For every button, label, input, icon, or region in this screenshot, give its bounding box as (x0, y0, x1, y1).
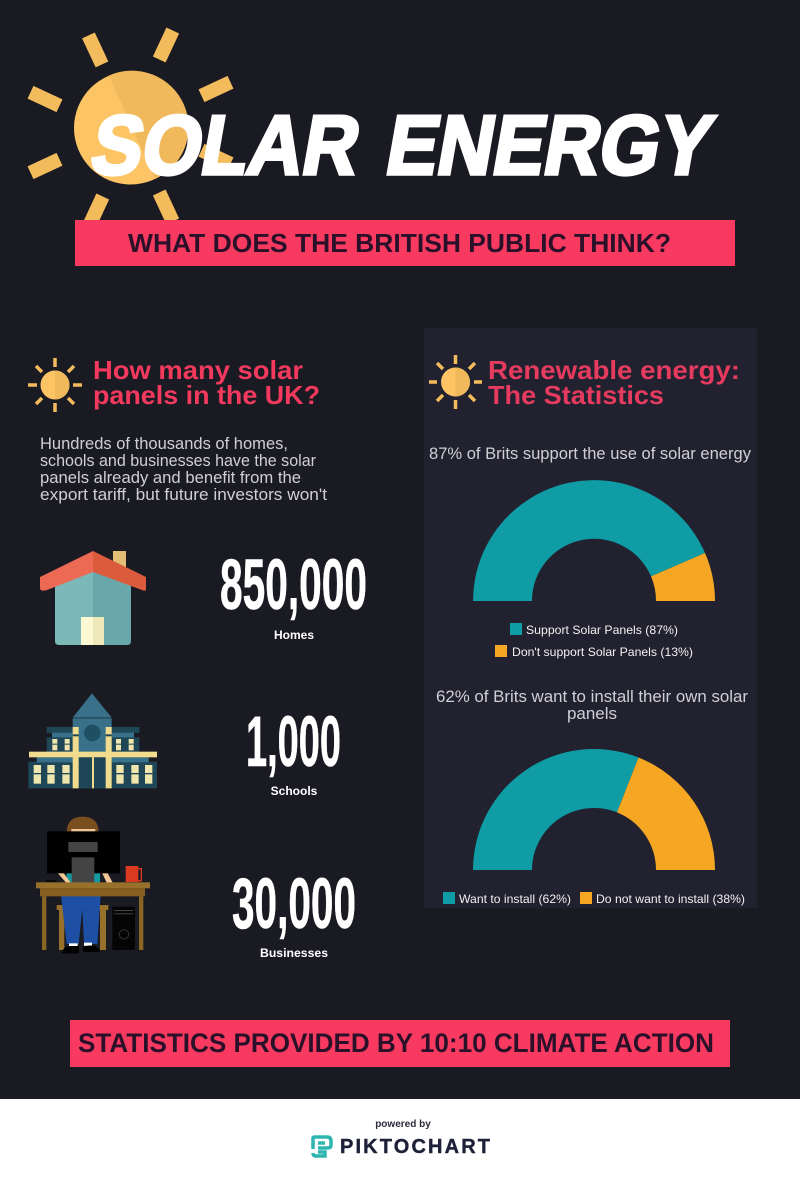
title: SOLAR (85, 98, 367, 192)
panel: renewable energy statistics (429, 355, 751, 906)
footer: piktochart wordmark: PIKTOCHART (340, 1136, 490, 1158)
chart title: install (436, 687, 748, 723)
stat: schools: Schools (271, 784, 318, 798)
stat: schools: 1,000 (246, 703, 341, 782)
icon: person at desk (36, 817, 150, 953)
heading: how many solar panels (93, 355, 320, 410)
legend: install (443, 892, 745, 906)
icon: school (28, 693, 157, 788)
text block: intro: panels already and benefit from the (40, 468, 301, 487)
title (85, 98, 720, 192)
stat: businesses: 30,000 (232, 865, 356, 944)
stat: homes (220, 546, 367, 642)
text block: intro: export tariff, but future investors won't (40, 485, 327, 504)
chart title: support: 87% of Brits support the use of solar energy (429, 444, 751, 463)
icon: house (40, 551, 146, 645)
title: ENERGY (380, 98, 720, 192)
legend: support (495, 623, 693, 659)
source banner: STATISTICS PROVIDED BY 10:10 CLIMATE ACTION (78, 1028, 714, 1058)
legend: install: Do not want to install (38%) (596, 892, 745, 906)
text block: intro: Hundreds of thousands of homes, (40, 434, 288, 453)
icon: piktochart logo (313, 1137, 331, 1156)
legend: support: Support Solar Panels (87%) (526, 623, 678, 637)
donut chart: support (473, 480, 715, 601)
stat: homes: 850,000 (220, 546, 367, 625)
stat: homes: Homes (274, 628, 314, 642)
subtitle banner: WHAT DOES THE BRITISH PUBLIC THINK? (128, 228, 671, 258)
footer (0, 1099, 800, 1179)
stat: businesses: Businesses (260, 946, 328, 960)
text block: intro (40, 434, 327, 504)
chart title: install: 62% of Brits want to install their own solar (436, 687, 748, 706)
heading: renewable energy (488, 355, 740, 410)
legend: support: Don't support Solar Panels (13%) (512, 645, 693, 659)
stat: businesses (232, 865, 356, 960)
subtitle banner (75, 220, 735, 266)
heading: renewable energy: The Statistics (488, 380, 664, 410)
heading: renewable energy: Renewable energy: (488, 355, 740, 385)
chart title: install: panels (567, 704, 617, 723)
panel: how many solar panels (28, 355, 327, 504)
panel: statistics background (424, 328, 757, 908)
donut chart: install (473, 749, 715, 870)
heading: how many solar panels: panels in the UK? (93, 380, 320, 410)
source banner (70, 1020, 730, 1067)
stat: schools (246, 703, 341, 798)
heading: how many solar panels: How many solar (93, 355, 303, 385)
icon: small sun left (28, 358, 82, 412)
icon: small sun right (429, 355, 482, 409)
footer: powered by: powered by (375, 1119, 431, 1130)
text block: intro: schools and businesses have the solar (40, 451, 316, 470)
legend: install: Want to install (62%) (459, 892, 571, 906)
icon: large sun (28, 28, 233, 228)
